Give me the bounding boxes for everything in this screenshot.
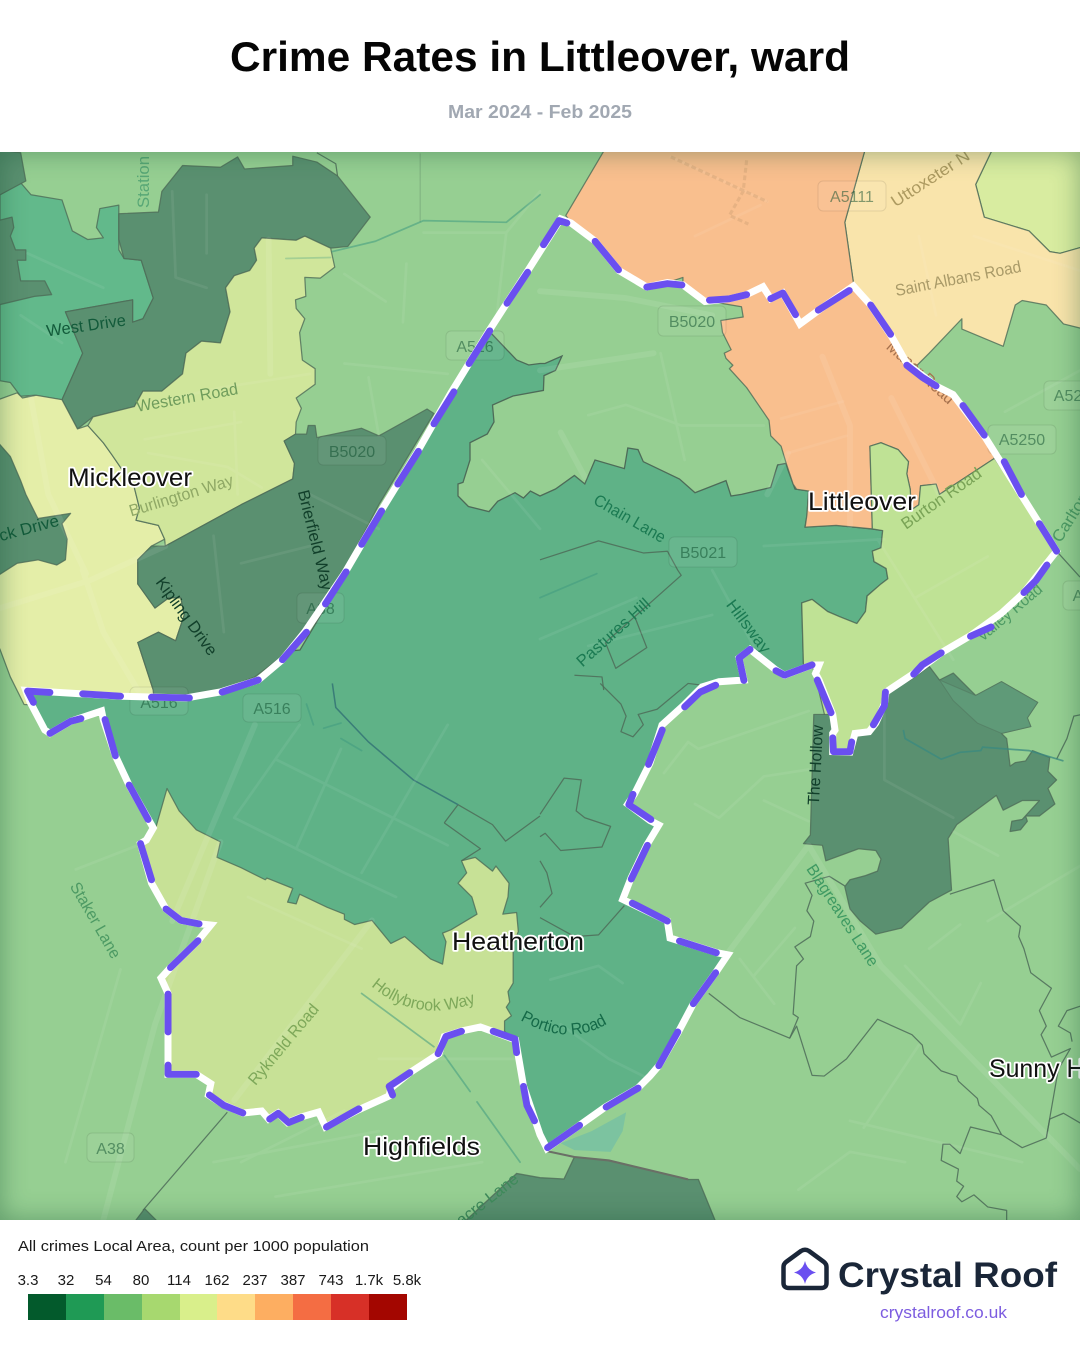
- ward boundary: white line: [26, 219, 1057, 1148]
- shield: A5111: [818, 181, 886, 211]
- street labels: Pastures Hill: [573, 595, 654, 671]
- logo wordmark: Crystal Roof: [838, 1256, 1057, 1295]
- area: ward centre, mid green: [34, 334, 888, 1143]
- legend scale labels: 3.3: [18, 1272, 38, 1289]
- pond: [561, 1112, 626, 1152]
- shield: A clipped: [1063, 581, 1080, 610]
- map edge vignette: [0, 152, 1080, 1220]
- street labels: Valley Road: [973, 580, 1046, 645]
- street labels: Staker Lane: [66, 879, 124, 962]
- street labels: Brierfield Way: [294, 488, 336, 593]
- legend scale labels: 1.7k: [355, 1272, 384, 1289]
- street labels: The Hollow: [805, 725, 827, 805]
- street labels: Manor Road: [883, 338, 958, 408]
- shield: B5021: [669, 537, 737, 567]
- areas: north-east neighbourhoods: [540, 148, 1080, 749]
- shield: A38 south: A38: [96, 1141, 125, 1158]
- area: ward south, yellow green: [136, 683, 540, 1222]
- shield: A5111: A5111: [830, 189, 874, 206]
- street labels: Station: [135, 156, 153, 208]
- street labels: West Drive: [45, 312, 127, 340]
- shield: A516 under boundary: [130, 687, 188, 715]
- legend title: All crimes Local Area, count per 1000 population: [18, 1238, 369, 1255]
- map base area: [0, 152, 1080, 1220]
- shield: A5250: [988, 425, 1056, 454]
- street labels: Blagreaves Lane: [802, 861, 882, 970]
- shield: A38 north: [297, 593, 344, 623]
- legend scale labels: 237: [242, 1272, 268, 1289]
- title: Crime Rates in Littleover, ward: [230, 33, 850, 80]
- legend scale labels: 32: [58, 1272, 74, 1289]
- legend scale labels: 80: [133, 1272, 149, 1289]
- shield: A516 north: A516: [456, 339, 494, 356]
- street labels: Chain Lane: [590, 491, 669, 547]
- place labels: Mickleover: [68, 464, 192, 492]
- header: title and date range: [230, 33, 850, 122]
- legend scale labels: 387: [280, 1272, 306, 1289]
- shield: B5021: B5021: [680, 545, 726, 562]
- areas: south-east neighbourhoods: [540, 666, 1080, 1222]
- shield: A516 north: [446, 331, 504, 360]
- street labels: Western Road: [135, 380, 239, 416]
- shield: B5020 east: [658, 306, 726, 336]
- street labels: Kipling Drive: [152, 574, 221, 659]
- road shields: [87, 181, 1080, 1162]
- place labels: Heatherton: [452, 928, 584, 956]
- street labels: Portico Road: [521, 1010, 606, 1035]
- street labels: Saint Albans Road: [894, 258, 1023, 300]
- area: south dark neighbourhood: [461, 1157, 717, 1225]
- street labels: Hollybrook Way: [372, 978, 473, 1011]
- ward boundary: purple dashes: [28, 221, 1057, 1148]
- river: [903, 730, 1063, 761]
- street labels: Burlington Way: [127, 471, 236, 520]
- shield: A516 south: [243, 694, 301, 722]
- website url: crystalroof.co.uk: [880, 1304, 1008, 1322]
- legend scale labels: 54: [95, 1272, 112, 1289]
- shield: A516 south: A516: [253, 701, 291, 718]
- street labels: Hillsway: [722, 596, 775, 657]
- legend scale labels: 743: [318, 1272, 344, 1289]
- date range subtitle: Mar 2024 - Feb 2025: [448, 101, 632, 122]
- place labels: Highfields: [363, 1133, 480, 1161]
- legend colour bar: [28, 1294, 407, 1320]
- legend scale labels: 5.8k: [393, 1272, 422, 1289]
- street labels: Burton Road: [898, 464, 985, 533]
- legend scale labels: 114: [167, 1272, 191, 1289]
- street labels: Rykneld Road: [245, 1001, 323, 1089]
- shield: A5250: A5250: [999, 432, 1045, 449]
- place labels: [68, 464, 1080, 1161]
- place labels: Littleover: [808, 488, 916, 516]
- legend scale labels: 162: [204, 1272, 230, 1289]
- shield: A38 south: [87, 1133, 134, 1162]
- shield: A52: [1044, 381, 1080, 410]
- shield: A38 north: A38: [306, 601, 335, 618]
- legend scale labels: [18, 1272, 422, 1289]
- shield: B5020 east: B5020: [669, 314, 715, 331]
- street labels: Uttoxeter N: [888, 152, 973, 211]
- panel: choropleth map: [0, 152, 1080, 1220]
- shield: A516 under boundary: A516: [140, 695, 178, 712]
- shield: B5020 west: [318, 436, 386, 465]
- road network overlay: [0, 157, 1080, 1220]
- shield: B5020 west: B5020: [329, 444, 375, 461]
- areas: north-west neighbourhoods: [0, 150, 540, 710]
- footer: legend and logo: [18, 1238, 1058, 1322]
- logo icon: house with star: [784, 1250, 826, 1288]
